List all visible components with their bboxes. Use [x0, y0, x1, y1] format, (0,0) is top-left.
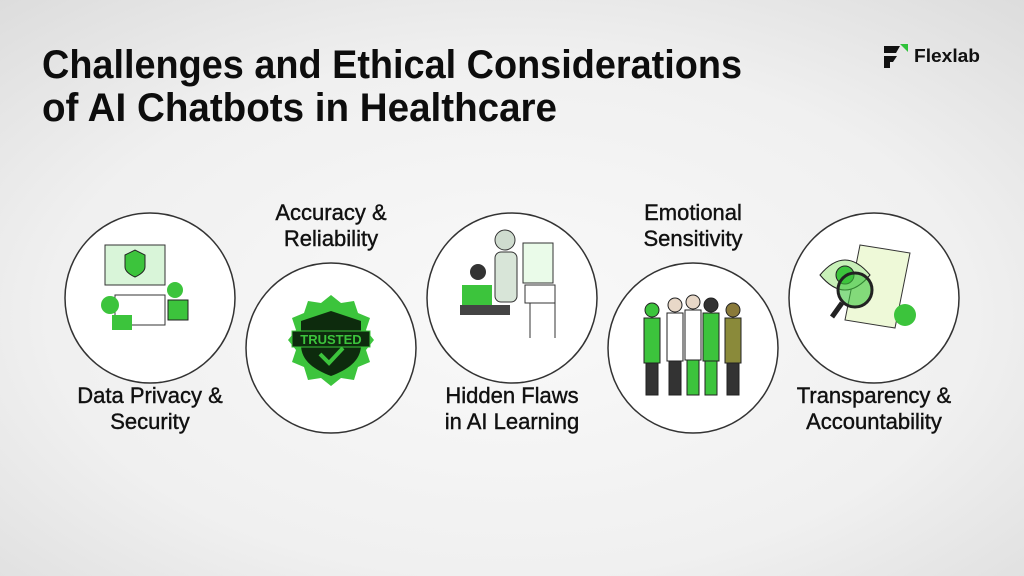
title: Challenges and Ethical Considerations: [42, 43, 742, 87]
labels: Accuracy &: [275, 200, 387, 225]
labels: Reliability: [284, 226, 378, 251]
labels: Security: [110, 409, 190, 434]
labels: Data Privacy &: [77, 383, 223, 408]
labels: Hidden Flaws: [445, 383, 579, 408]
panel: hidden flaws: [427, 213, 597, 383]
logo: Flexlab: Flexlab: [914, 46, 980, 66]
panel: trusted badge: TRUSTED: [300, 332, 362, 347]
panel: emotional sensitivity: [608, 263, 778, 433]
panel: trusted badge: [246, 263, 416, 433]
logo: Flexlab: [884, 44, 980, 68]
labels: Transparency &: [797, 383, 952, 408]
labels: Sensitivity: [643, 226, 743, 251]
labels: Emotional: [644, 200, 742, 225]
labels: in AI Learning: [445, 409, 579, 434]
labels: [77, 200, 952, 434]
labels: Accountability: [806, 409, 942, 434]
panel: data privacy: [65, 213, 235, 383]
title: [42, 43, 742, 130]
panel: transparency: [789, 213, 959, 383]
title: of AI Chatbots in Healthcare: [42, 86, 557, 130]
